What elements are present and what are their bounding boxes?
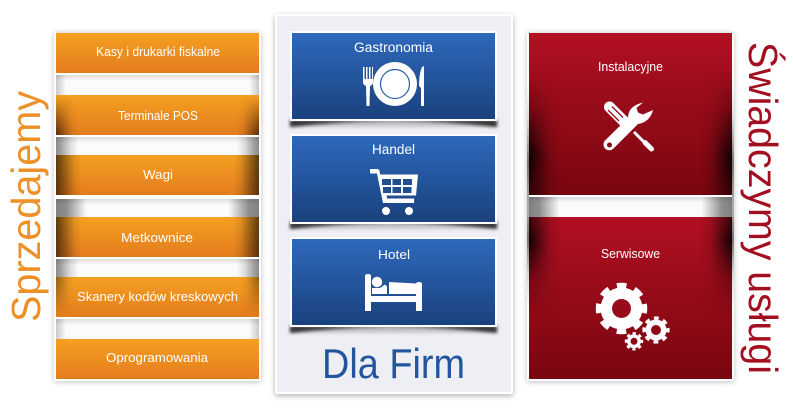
panel: services [527,33,734,382]
icon: bed [365,274,422,311]
card: Handel: Handel [372,142,415,157]
card: Hotel [290,237,497,333]
icon: wrench and screwdriver [603,102,653,150]
item: Wagi [56,155,259,195]
card: Hotel: Hotel [378,247,410,262]
card: Gastronomia: Gastronomia [354,40,433,55]
heading: Sprzedajemy: Sprzedajemy [3,91,49,322]
item: Wagi: Wagi [143,167,173,182]
item: Skanery kodów kreskowych [56,277,259,317]
card: Serwisowe: Serwisowe [601,247,660,261]
item: Oprogramowania: Oprogramowania [106,351,208,365]
panel: Dla Firm [275,14,513,396]
item: Terminale POS: Terminale POS [118,109,198,123]
icon: plate and cutlery [363,62,424,106]
panel: products sold [54,33,261,382]
card: Gastronomia [290,31,497,127]
item: Oprogramowania [56,339,259,379]
item: Metkownice: Metkownice [121,230,193,245]
icon: shopping cart [370,169,418,215]
card: Serwisowe [529,217,732,379]
card: Instalacyjne [529,33,732,195]
item: Skanery kodów kreskowych: Skanery kodów kreskowych [77,289,238,304]
item: Kasy i drukarki fiskalne: Kasy i drukarki fiskalne [96,45,220,59]
card: Handel [290,134,497,229]
icon: gears [598,286,668,349]
item: Kasy i drukarki fiskalne [56,33,259,73]
heading: Dla Firm: Dla Firm [322,340,465,387]
item: Terminale POS [56,95,259,135]
card: Instalacyjne: Instalacyjne [598,60,663,74]
heading: Świadczymy usługi: Świadczymy usługi [740,42,786,374]
item: Metkownice [56,217,259,257]
